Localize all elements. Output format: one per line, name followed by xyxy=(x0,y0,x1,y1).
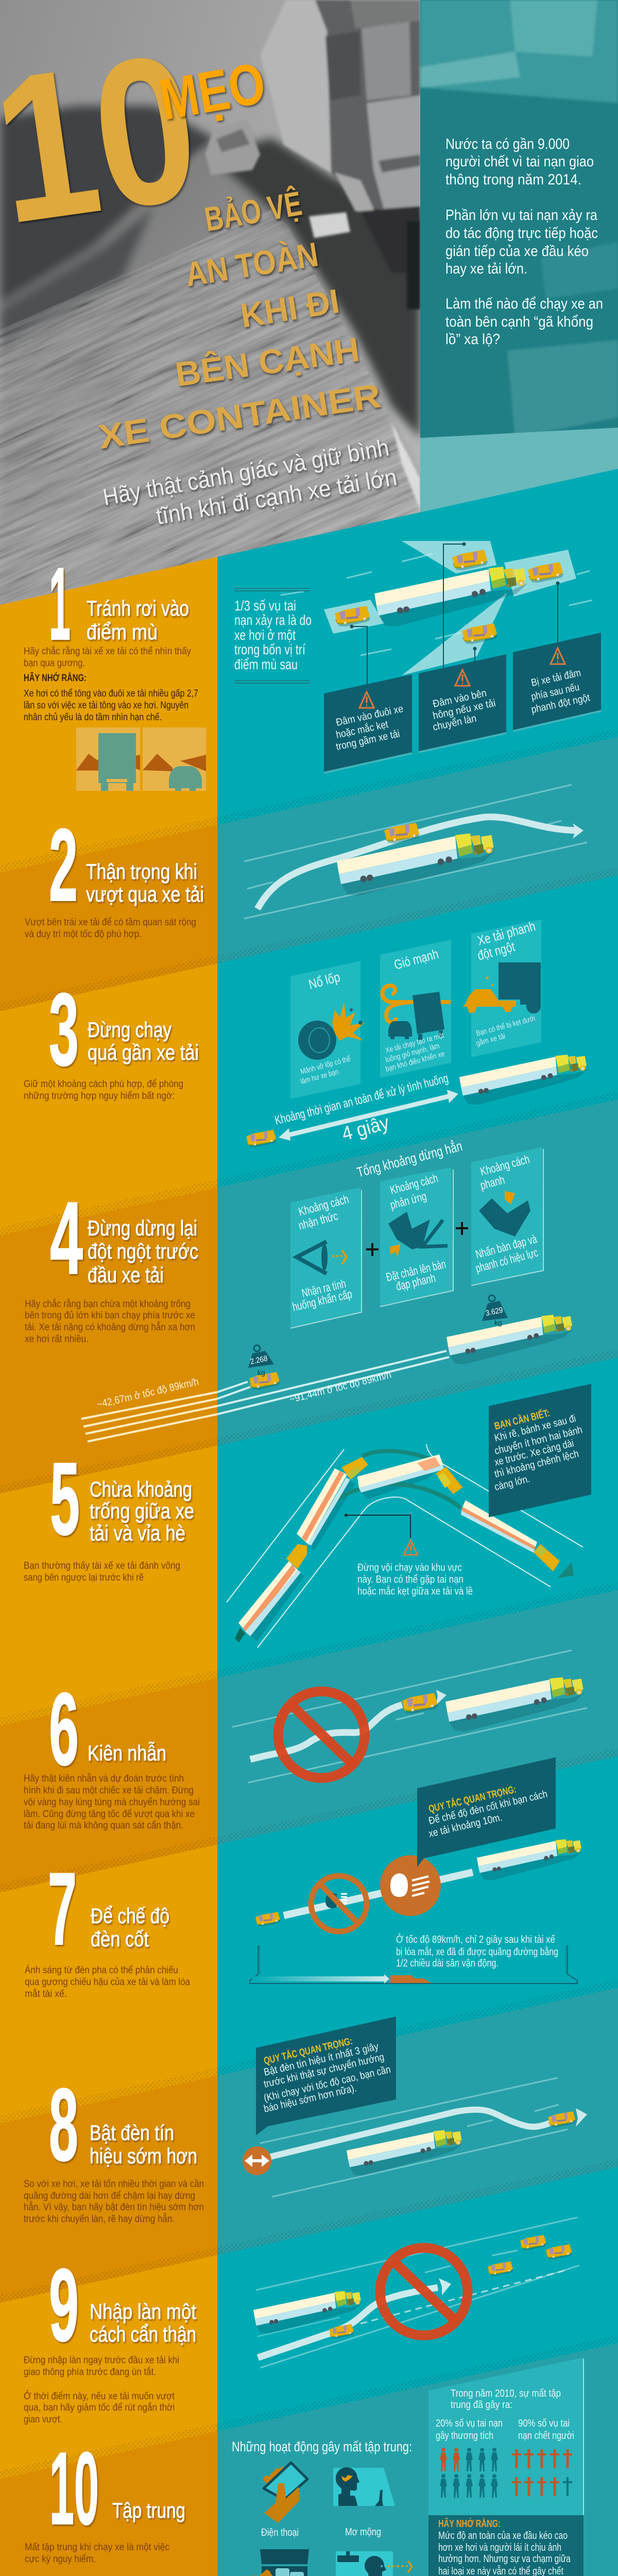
section 6: left text: Kiên nhẫn xyxy=(88,1741,166,1765)
title lines xyxy=(96,184,383,456)
section 3: left text: quá gần xe tải xyxy=(88,1040,199,1064)
panel: remember note: hưởng hơn. Nhưng sự va chạm giữa xyxy=(438,2553,571,2565)
section 6: left text: hình khi đi sau một chiếc xe tải chậm. Đừng xyxy=(24,1785,194,1796)
icon: reaching for object xyxy=(247,2549,309,2576)
section 9: left text: cách cẩn thận xyxy=(90,2322,196,2346)
blind spot stat: nạn xảy ra là do xyxy=(234,612,312,628)
panel: strong wind: Xe tải chạy tạo ra một xyxy=(385,1031,445,1055)
callout: rear collision: hoặc mắc kẹt xyxy=(335,718,389,741)
panel: perception distance: Nhận ra tình xyxy=(300,1277,347,1300)
section 9: left text: qua, bạn hãy giảm tốc để rút ngắn thời xyxy=(24,2402,175,2413)
intro text: người chết vì tai nạn giao xyxy=(445,154,594,170)
panel: sudden braking: Xe tải phanh xyxy=(476,918,537,948)
panel: braking distance: phanh xyxy=(479,1173,506,1192)
panel: braking distance xyxy=(471,1147,543,1285)
panel: remember note: hơn xe hơi và người lái ít chịu ảnh xyxy=(438,2542,561,2553)
section 3: left text xyxy=(24,972,199,1101)
section 2: left text: Thận trọng khi xyxy=(86,859,197,884)
section 1: left text: lần so với việc xe tải tông vào xe hơi. Nguyên xyxy=(24,700,188,711)
header photo: truck on highway xyxy=(0,0,618,605)
panel: 2010 distraction stats: trung đã gây ra: xyxy=(451,2399,512,2411)
icon: phone xyxy=(261,2463,307,2538)
section 1: left text: điểm mù xyxy=(87,620,158,644)
callout: side collision: Đâm vào bên xyxy=(432,687,488,710)
callout: you need to know: xe trước. Xe càng dài xyxy=(493,1437,575,1468)
icon: daydreaming: Mơ mộng xyxy=(345,2527,381,2538)
panel: perception distance: nhận thức xyxy=(297,1209,339,1232)
panel: 2010 distraction stats: gây thương tích xyxy=(436,2430,493,2442)
section 4: truck and weights: ~42,67m ở tốc độ 89km/h xyxy=(96,1376,200,1411)
callout: hit from behind: phía sau nếu xyxy=(530,682,580,703)
callout: you need to know: Khi rẽ, bánh xe sau đi xyxy=(493,1413,577,1444)
section 6: tailgating illustration xyxy=(232,1650,587,1783)
section 3: truck and 4 second gap: 4 giây xyxy=(339,1112,391,1145)
intro text: thông trong năm 2014. xyxy=(445,172,581,188)
section 2: left text: và duy trì một tốc độ phù hợp. xyxy=(25,929,142,940)
panel: 2010 distraction stats: 20% số vụ tai nạn xyxy=(436,2418,503,2429)
section 10: left text: 10 xyxy=(49,2431,99,2546)
section 6: left text: 6 xyxy=(49,1672,79,1787)
football field distance diagram xyxy=(250,1945,577,1984)
icon: phone: Điện thoại xyxy=(261,2527,299,2538)
callout: you need to know: BẠN CẦN BIẾT: xyxy=(493,1407,551,1432)
callout: signal early rule: QUY TẮC QUAN TRỌNG: xyxy=(263,2035,354,2067)
section 8: left text xyxy=(24,2067,204,2225)
callout: rear collision xyxy=(324,674,412,774)
panel: remember note xyxy=(428,2515,583,2576)
section 5: left text: Chừa khoảng xyxy=(90,1477,192,1501)
callout: important rule low beam: xe tải khoảng 10m. xyxy=(427,1812,503,1840)
section 9: merging illustration xyxy=(253,2217,579,2368)
section 6: left text xyxy=(24,1672,200,1831)
section 2: left text: vượt qua xe tải xyxy=(86,882,204,906)
turning truck illustration xyxy=(227,1444,583,1648)
section 1: road lanes xyxy=(281,554,592,655)
blind spot stat: 1/3 số vụ tai xyxy=(234,598,296,614)
glare distance note xyxy=(396,1933,558,1969)
panel: perception distance: huống khẩn cấp xyxy=(291,1287,353,1314)
section 7: left text: Để chế độ xyxy=(91,1904,169,1928)
section 4: left text: bên trong đủ lớn khi bạn chạy phía trước xe xyxy=(25,1310,195,1321)
title lines: BẢO VỆ xyxy=(202,184,305,239)
section 5: left text: tải và vỉa hè xyxy=(90,1521,185,1545)
section 4: left text: đầu xe tải xyxy=(88,1263,164,1287)
section 1: left text: Xe hơi có thể tông vào đuôi xe tải nhiều gấp 2,7 xyxy=(24,688,198,699)
panel: braking distance: Nhấn bàn đạp và xyxy=(474,1232,538,1261)
section 6: left text: Hãy thật kiên nhẫn và dự đoán trước tình xyxy=(24,1773,184,1784)
section 4: left text: Hãy chắc rằng bạn chừa một khoảng trống xyxy=(25,1298,191,1310)
section 4: truck and weights: kg xyxy=(494,1318,502,1327)
leader lines xyxy=(350,543,559,690)
callout: signal early rule: Bật đèn tín hiệu ít nhất 3 giây xyxy=(263,2041,380,2078)
plus sign xyxy=(456,1222,468,1235)
danger zone note: Đừng vội chạy vào khu vực xyxy=(357,1562,462,1573)
section 1: left text: bạn qua gương. xyxy=(24,658,85,669)
section 9: left text xyxy=(24,2248,196,2425)
callout: important rule low beam xyxy=(417,1757,556,1867)
panel: reaction distance: Đặt chân lên bàn xyxy=(385,1257,447,1284)
section 8: left text: Bật đèn tín xyxy=(90,2121,174,2145)
section 6: left text: lầm. Cũng đừng tăng tốc để vượt qua khi xe xyxy=(24,1809,195,1820)
callout: side collision xyxy=(419,654,506,753)
panel: strong wind: luồng gió mạnh, làm xyxy=(385,1041,440,1064)
panel: sudden braking xyxy=(462,918,541,1057)
teal photo overlay panel xyxy=(420,0,618,515)
panel: 2010 distraction stats: 90% số vụ tai xyxy=(518,2418,570,2429)
distractions heading: Những hoạt động gây mất tập trung: xyxy=(232,2439,412,2454)
panel: strong wind: Gió mạnh xyxy=(392,946,440,973)
callout: hit from behind: Bị xe tải đâm xyxy=(530,667,582,689)
section 9: left text: Ở thời điểm này, nếu xe tải muốn vượt xyxy=(24,2391,175,2402)
callout: side collision: hông nếu xe tải xyxy=(432,698,496,722)
section 9: left text: giao thông phía trước đang ùn tắt. xyxy=(24,2366,156,2378)
section 4: truck and weights: 2.268 xyxy=(249,1354,268,1366)
section 8: left text: So với xe hơi, xe tải tốn nhiều thời gian và cần xyxy=(24,2179,204,2190)
intro text: toàn bên cạnh “gã khổng xyxy=(445,314,593,330)
blind spot zones xyxy=(324,541,576,675)
panel: sudden braking: đột ngột xyxy=(476,939,517,963)
panel: tire blowout xyxy=(290,961,365,1099)
panel: tire blowout: Mảnh vỡ lốp có thể xyxy=(300,1055,352,1076)
callout: signal early rule: trước khi thật sự chuyển hướng xyxy=(263,2052,385,2090)
total stopping distance heading: Tổng khoảng dừng hẳn xyxy=(355,1137,464,1180)
section 7: left text xyxy=(25,1852,190,1999)
section 9: left text: gian vượt. xyxy=(24,2414,62,2425)
section 7: left text: qua gương chiếu hậu của xe tải và làm lóa xyxy=(25,1977,190,1988)
section 7: headlight illustration xyxy=(255,1839,583,1931)
section 6: left text: tải đang lùi mà không quan sát cẩn thận. xyxy=(24,1820,183,1831)
skid lines xyxy=(81,1392,217,1442)
danger zone note: hoặc mắc kẹt giữa xe tải và lề xyxy=(357,1585,473,1597)
panel: remember note: HÃY NHỚ RẰNG: xyxy=(438,2517,501,2530)
illustration: driver's view behind truck vs car xyxy=(76,727,206,791)
section 8: left text: hiệu sớm hơn xyxy=(90,2144,197,2168)
intro text: hay xe tải lớn. xyxy=(445,261,527,277)
section 2: left text xyxy=(25,808,204,940)
section 4: left text: Đừng dừng lại xyxy=(88,1216,197,1240)
section 4: left text xyxy=(25,1181,198,1345)
panel: 2010 distraction stats: Trong năm 2010, sự mất tập xyxy=(451,2388,561,2399)
panel: 2010 distraction stats: nạn chết người xyxy=(518,2430,574,2442)
glare distance note: bị lóa mắt, xe đã đi được quãng đường bằng xyxy=(396,1946,558,1958)
glare distance note: Ở tốc độ 89km/h, chỉ 2 giây sau khi tài xế xyxy=(396,1933,555,1945)
panel: perception distance xyxy=(290,1188,362,1328)
section 3: truck and 4 second gap xyxy=(246,1055,588,1147)
section 3: left text: Giữ một khoảng cách phù hợp, để phòng xyxy=(24,1079,183,1090)
section 5: left text: 5 xyxy=(50,1442,80,1556)
section 5: left text: Bạn thường thấy tài xế xe tải đánh võng xyxy=(24,1561,180,1571)
section 9: left text: 9 xyxy=(49,2248,79,2363)
section 5: left text xyxy=(24,1442,194,1583)
section 6: left text: vội vàng hay lúng túng mà chuyển hướng sai xyxy=(24,1797,200,1808)
section 8: signaling illustration xyxy=(243,2078,587,2197)
section 7: left text: mắt tài xế. xyxy=(25,1988,67,1999)
callout: rear collision: trong gầm xe tải xyxy=(335,728,401,753)
section 4: left text: xe hơi rất nhiều. xyxy=(25,1334,89,1345)
intro text: Phần lớn vụ tai nạn xảy ra xyxy=(445,207,598,224)
title word MẸO: MẸO xyxy=(154,50,270,132)
section 4: truck and weights: 3.629 xyxy=(485,1306,504,1318)
section 10: left text xyxy=(25,2431,185,2565)
section 4: left text: 4 xyxy=(50,1181,83,1296)
title lines: BÊN CẠNH xyxy=(173,330,362,394)
section 8: left text: trước khi chuyển làn, rẽ hay dừng hẳn. xyxy=(24,2213,175,2225)
section 3: left text: Đừng chạy xyxy=(88,1018,171,1042)
section 7: left text: Ánh sáng từ đèn pha có thể phản chiếu xyxy=(25,1965,178,1976)
section 10: left text: Mất tập trung khi chạy xe là một việc xyxy=(25,2542,169,2553)
callout: hit from behind: phanh đột ngột xyxy=(530,692,591,716)
blind spot stat: điểm mù sau xyxy=(234,656,298,672)
intro text: do tác động trực tiếp hoặc xyxy=(445,225,598,242)
callout: you need to know: thì khoảng chênh lệch xyxy=(493,1448,580,1480)
section 1: left text: 1 xyxy=(49,547,71,662)
callout: hit from behind xyxy=(513,633,601,732)
section 2: left text: 2 xyxy=(49,808,78,923)
section 1: left text: Tránh rơi vào xyxy=(87,596,189,620)
section 10: left text: cực kỳ nguy hiểm. xyxy=(25,2554,96,2565)
section 9: left text: Nhập làn một xyxy=(90,2299,196,2324)
section 7: left text: đèn cốt xyxy=(91,1927,149,1951)
subtitle: tĩnh khi đi cạnh xe tải lớn xyxy=(154,463,399,530)
plus sign xyxy=(366,1243,379,1256)
panel: sudden braking: Bạn có thể bị kẹt dưới xyxy=(475,1014,536,1038)
callout: side collision: chuyển làn xyxy=(432,713,477,733)
section 9: left text: Đừng nhập làn ngay trước đầu xe tải khi xyxy=(24,2355,179,2366)
section 1: left text: Hãy chắc rằng tài xế xe tải có thể nhìn thấy xyxy=(24,646,191,657)
section 4: truck and weights xyxy=(96,1295,574,1411)
section 4: left text: tải. Xe tải nặng có khoảng dừng hẳn xa hơn xyxy=(25,1321,195,1333)
blind spot stat xyxy=(234,588,312,684)
callout: you need to know: chuyển ít hơn hai bánh xyxy=(493,1424,583,1457)
intro text: gián tiếp của xe đầu kéo xyxy=(445,243,589,260)
danger zone note xyxy=(345,1514,473,1597)
title lines: AN TOÀN xyxy=(183,235,321,294)
section 3: left text: những trường hợp nguy hiểm bất ngờ: xyxy=(24,1091,175,1101)
section 10: left text: Tập trung xyxy=(112,2498,185,2522)
danger zone note: này. Bạn có thể gặp tai nạn xyxy=(357,1574,464,1585)
title lines: XE CONTAINER xyxy=(96,376,383,456)
callout: signal early rule: báo hiệu sớm hơn nữa). xyxy=(263,2082,357,2115)
title lines: KHI ĐI xyxy=(238,282,342,335)
section 2: left text: Vượt bên trái xe tải để có tầm quan sát rộng xyxy=(25,917,196,928)
section 8: left text: hẳn. Vì vậy, bạn hãy bật đèn tín hiệu sớm hơn xyxy=(24,2201,204,2213)
panel: braking distance: Khoảng cách xyxy=(479,1152,531,1178)
section 1: left text: HÃY NHỚ RẰNG: xyxy=(24,672,87,684)
panel: reaction distance: phản ứng xyxy=(389,1189,428,1212)
callout: important rule low beam: Để chế độ đèn cốt khi bạn cách xyxy=(427,1788,548,1827)
section 1: left text: nhân chủ yếu là do tầm nhìn hạn chế. xyxy=(24,712,162,723)
section 3: truck and 4 second gap: Khoảng thời gian an toàn để xử lý tình huống xyxy=(273,1071,450,1128)
icon: curiosity xyxy=(336,2551,412,2576)
section 5: left text: trống giữa xe xyxy=(90,1499,194,1523)
intro text: lồ” xa lộ? xyxy=(445,331,500,348)
section 1: left text xyxy=(24,547,198,723)
intro text: Nước ta có gần 9.000 xyxy=(445,136,570,152)
icon: daydreaming xyxy=(333,2467,395,2538)
callout: you need to know xyxy=(489,1384,591,1517)
panel: reaction distance: đạp phanh xyxy=(394,1271,437,1293)
panel: 2010 distraction stats xyxy=(428,2358,583,2515)
panel: reaction distance: Khoảng cách xyxy=(389,1171,439,1197)
section 2: overtaking illustration xyxy=(244,785,587,919)
subtitle: Hãy thật cảnh giác và giữ bình xyxy=(101,434,391,511)
section 4: left text: đột ngột trước xyxy=(88,1239,198,1263)
section 1 truck and cars xyxy=(335,550,564,644)
callout: signal early rule: (Khi chạy với tốc độ cao, bạn cần xyxy=(263,2064,392,2104)
panel: tire blowout: làm hư xe bạn xyxy=(300,1067,339,1086)
section 8: left text: 8 xyxy=(49,2067,78,2182)
panel: sudden braking: gầm xe tải xyxy=(475,1031,506,1048)
blind spot stat: trong bốn vị trí xyxy=(234,641,305,657)
section 3: left text: 3 xyxy=(49,972,79,1087)
callout: you need to know: càng lớn. xyxy=(493,1473,531,1493)
panel: braking distance: phanh có hiệu lực xyxy=(474,1246,539,1275)
section 7: left text: 7 xyxy=(48,1852,77,1967)
panel: perception distance: Khoảng cách xyxy=(297,1192,350,1218)
glare distance note: 1/2 chiều dài sân vận động. xyxy=(396,1958,499,1969)
panel: strong wind xyxy=(380,940,451,1078)
callout: important rule low beam: QUY TẮC QUAN TRỌNG: xyxy=(427,1783,518,1815)
section 5: left text: sang bên ngược lại trước khi rẽ xyxy=(24,1572,144,1583)
panel: reaction distance xyxy=(380,1167,453,1307)
intro text xyxy=(445,136,603,348)
section 4: truck and weights: ~91,44m ở tốc độ 89km/h xyxy=(288,1369,392,1405)
blind spot stat: xe hơi ở một xyxy=(234,627,296,643)
callout: rear collision: Đâm vào đuôi xe xyxy=(335,703,404,728)
panel: strong wind: bạn khó điều khiển xe xyxy=(385,1049,445,1074)
callout: signal early rule xyxy=(256,2016,396,2136)
section 8: left text: quãng đường dài hơn để chậm lại hay dừng xyxy=(24,2191,195,2201)
section 4: truck and weights: kg xyxy=(258,1368,265,1377)
panel: remember note: Mức độ an toàn của xe đầu kéo cao xyxy=(438,2530,568,2541)
panel: tire blowout: Nổ lốp xyxy=(307,969,341,992)
